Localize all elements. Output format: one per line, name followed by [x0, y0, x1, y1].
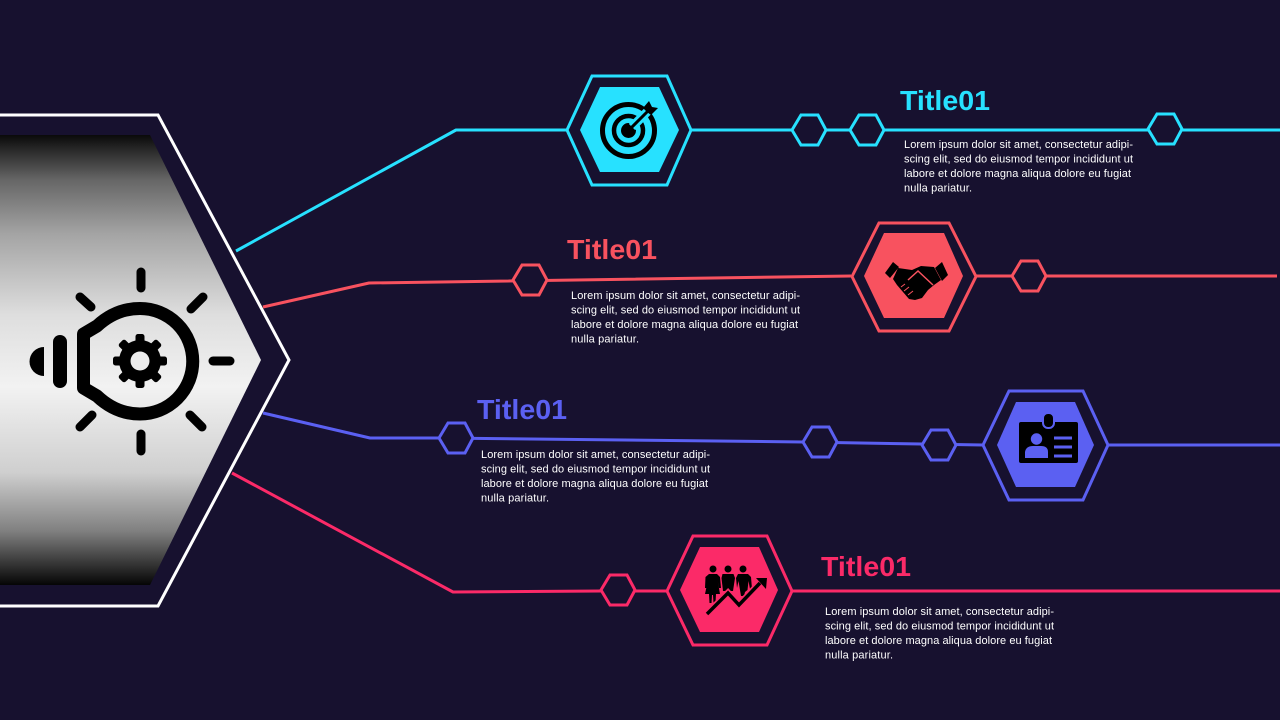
node: small pink hexagon [601, 575, 635, 605]
node: small blue hexagons [439, 423, 956, 460]
text block: red [571, 290, 800, 346]
hexagon fill [580, 87, 679, 172]
text block: cyan: nulla pariatur. [904, 182, 972, 194]
text block: cyan: Lorem ipsum dolor sit amet, consectetur adipi- [904, 139, 1133, 151]
hexagon outline [852, 223, 976, 331]
panel: growth team node [667, 536, 792, 645]
text block: pink: scing elit, sed do eiusmod tempor incididunt ut [825, 620, 1054, 632]
white hexagon outline [0, 115, 289, 606]
connector: pink line right [792, 590, 1280, 592]
node: small cyan hexagons [792, 114, 1182, 145]
title: red: Title01 [567, 234, 657, 265]
panel: ID card node [983, 391, 1108, 500]
icon: people with rising arrow [705, 566, 767, 614]
panel: central hexagon with bulb [0, 115, 289, 606]
text block: cyan: scing elit, sed do eiusmod tempor incididunt ut [904, 154, 1133, 166]
hexagon outline [983, 391, 1108, 500]
connector: red line [263, 276, 851, 307]
connector: blue line right [1108, 444, 1280, 446]
text block: pink: Lorem ipsum dolor sit amet, consectetur adipi- [825, 606, 1054, 618]
text block: pink: labore et dolore magna aliqua dolore eu fugiat [825, 635, 1052, 647]
node: small red hexagons [513, 261, 1046, 295]
text block: blue: labore et dolore magna aliqua dolore eu fugiat [481, 478, 708, 490]
title: cyan: Title01 [900, 85, 990, 116]
hexagon fill [680, 547, 778, 632]
icon: target with arrow [602, 101, 658, 156]
text block: red: nulla pariatur. [571, 334, 639, 346]
hexagon outline [567, 76, 691, 185]
connector: cyan line [236, 130, 567, 251]
icon: handshake [885, 262, 948, 300]
gradient hexagon fill [0, 135, 261, 585]
text block: red: labore et dolore magna aliqua dolore eu fugiat [571, 319, 798, 331]
title: blue: Title01 [477, 394, 567, 425]
text block: cyan [904, 139, 1133, 194]
hexagon fill [864, 233, 963, 318]
connector: blue line [263, 413, 983, 445]
text block: red: Lorem ipsum dolor sit amet, consectetur adipi- [571, 290, 800, 302]
text block: blue: nulla pariatur. [481, 492, 549, 504]
text block: blue: Lorem ipsum dolor sit amet, consectetur adipi- [481, 449, 710, 461]
panel: handshake node [852, 223, 976, 331]
text block: cyan: labore et dolore magna aliqua dolore eu fugiat [904, 168, 1131, 180]
icon: light bulb with gear [30, 272, 230, 451]
text block: pink [825, 606, 1054, 662]
connector: cyan line right [692, 128, 1280, 132]
panel: target node [567, 76, 691, 185]
hexagon outline [667, 536, 792, 645]
icon: ID card [1019, 413, 1078, 463]
connector: pink line [232, 473, 667, 592]
connector: red line right [976, 274, 1277, 278]
text block: red: scing elit, sed do eiusmod tempor incididunt ut [571, 304, 800, 316]
text block: blue [481, 449, 710, 504]
text block: pink: nulla pariatur. [825, 650, 893, 662]
text block: blue: scing elit, sed do eiusmod tempor incididunt ut [481, 464, 710, 476]
hexagon fill [997, 402, 1094, 487]
title: pink: Title01 [821, 551, 911, 582]
